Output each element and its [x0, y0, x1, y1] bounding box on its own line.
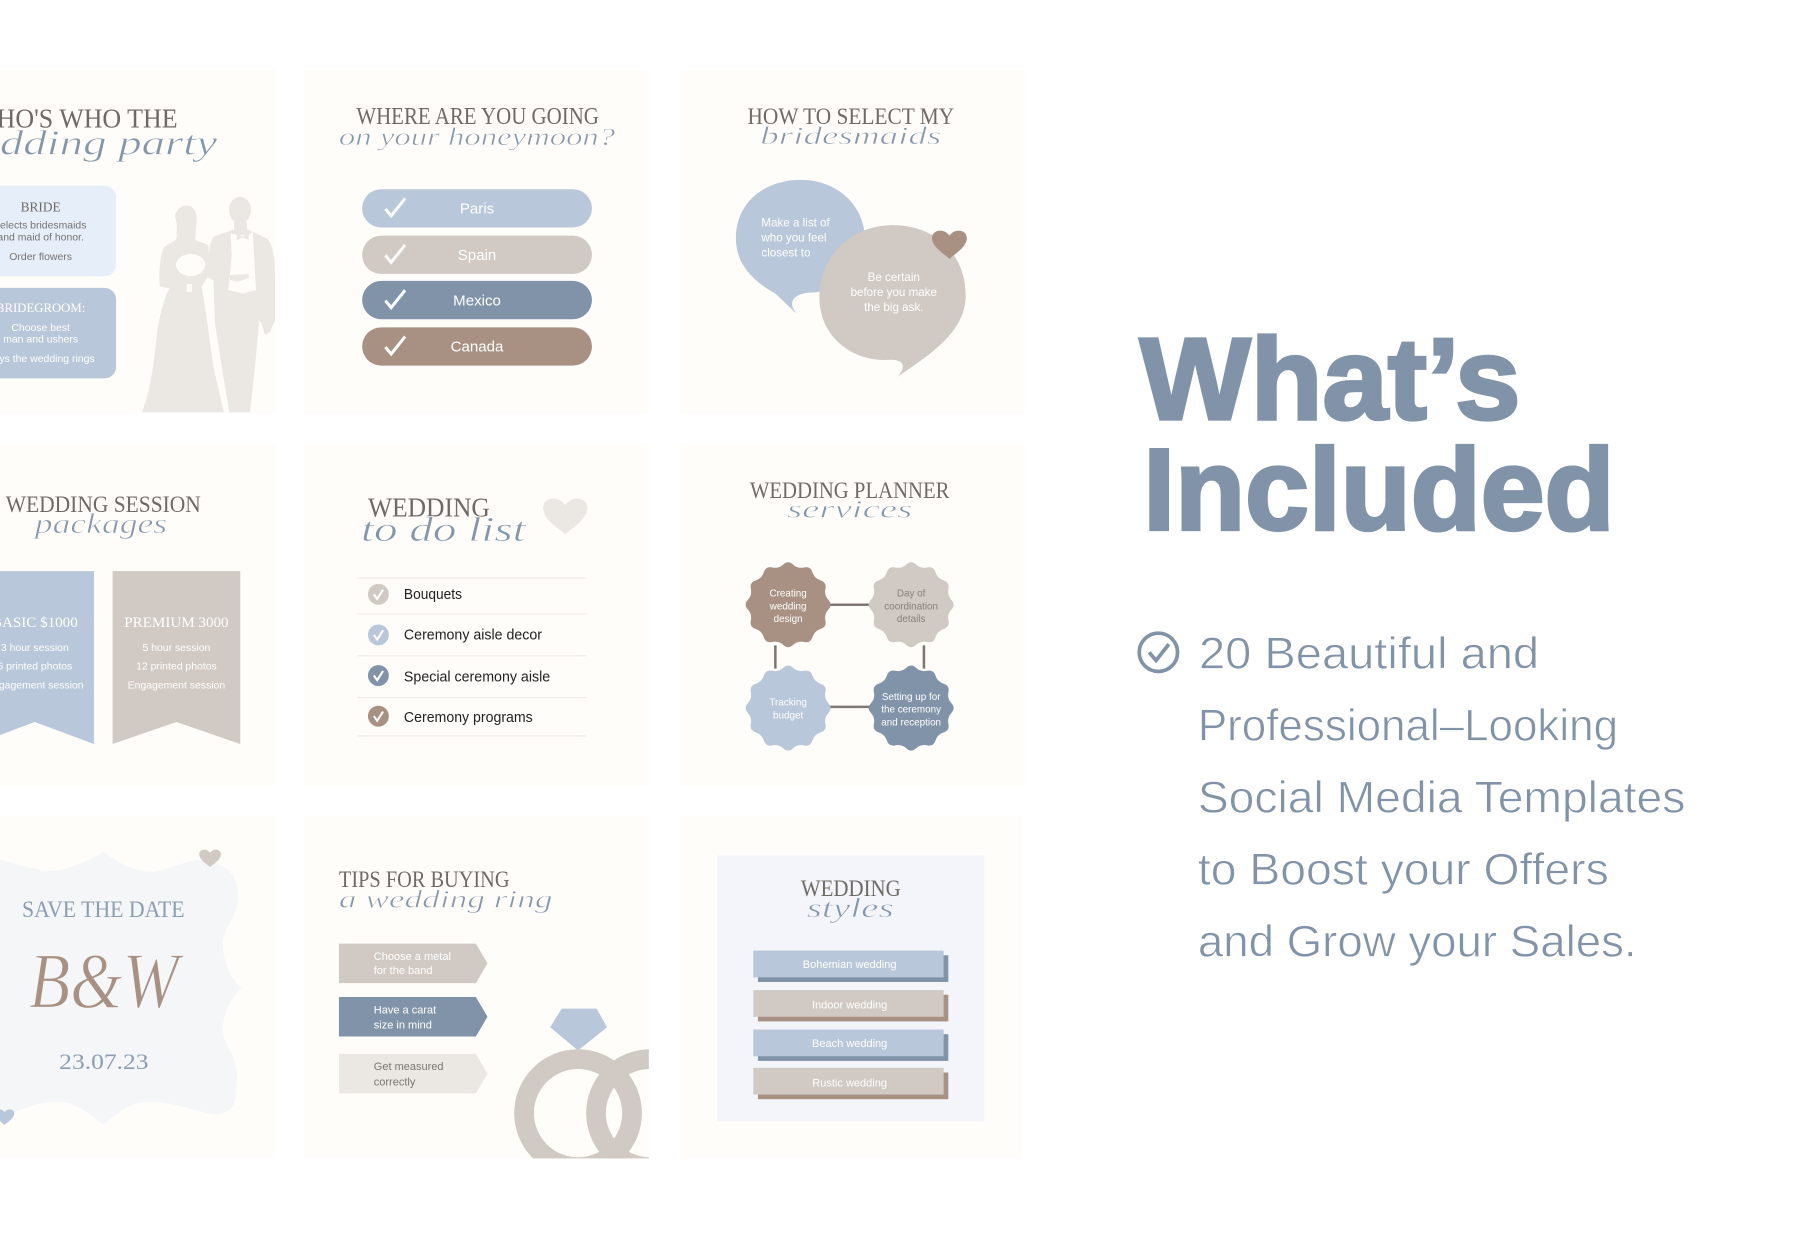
badge: day of coordination details: coordination — [884, 601, 938, 612]
date: 23.07.23 — [59, 1049, 149, 1074]
text block: description: and Grow your Sales. — [1198, 917, 1637, 966]
speech bubble: blue — [736, 180, 865, 313]
heading: wedding session: WEDDING SESSION — [6, 492, 201, 518]
item: Ceremony aisle decor — [368, 624, 542, 645]
tip arrow: measured: correctly — [374, 1076, 416, 1088]
illustration: diamond rings — [514, 1008, 649, 1158]
option: Spain: Spain — [458, 247, 496, 264]
ribbon: premium package: 5 hour session — [142, 643, 211, 654]
tip arrow: measured — [339, 1054, 488, 1093]
text block: description: Professional–Looking — [1198, 702, 1618, 751]
option: Mexico: Mexico — [453, 292, 501, 309]
ribbon: basic package: 3 hour session — [1, 643, 69, 654]
bar: Rustic wedding — [753, 1068, 948, 1099]
ribbon: premium package: Engagement session — [128, 680, 225, 691]
speech bubble: taupe: Be certain — [868, 271, 920, 284]
ribbon: premium package: PREMIUM 3000 — [124, 615, 229, 631]
speech bubble: blue: Make a list of — [761, 216, 831, 229]
option: Paris — [362, 189, 592, 228]
badge: setting up ceremony: the ceremony — [881, 705, 941, 716]
badge: day of coordination details: details — [897, 614, 925, 625]
tip arrow: measured: Get measured — [374, 1061, 444, 1073]
ribbon: premium package: 12 printed photos — [136, 662, 217, 673]
text block: description: Social Media Templates — [1198, 774, 1685, 823]
text block: description: to Boost your Offers — [1198, 845, 1609, 894]
option: Spain — [362, 236, 592, 274]
panel: save the date — [0, 816, 275, 1158]
item: Bouquets — [368, 584, 462, 605]
script heading: on your honeymoon: on your honeymoon? — [339, 122, 615, 151]
item: Special ceremony aisle — [368, 665, 550, 686]
card: bridegroom — [0, 288, 116, 378]
title: What's Included — [1140, 314, 1615, 554]
panel: who's who the wedding party — [0, 70, 275, 413]
tip arrow: metal — [339, 944, 488, 983]
illustration: bride and groom silhouette — [142, 197, 275, 412]
speech bubble: taupe: before you make — [851, 286, 937, 299]
bar: Rustic wedding: Rustic wedding — [812, 1077, 887, 1089]
badge: creating wedding design: wedding — [769, 601, 806, 612]
panel: how to select bridesmaids — [680, 70, 1025, 413]
bar: Beach wedding — [753, 1030, 948, 1061]
badge: tracking budget — [746, 666, 831, 751]
bar: Beach wedding: Beach wedding — [812, 1038, 887, 1050]
item: Ceremony programs: Ceremony programs — [404, 709, 533, 726]
icon: pale heart — [543, 499, 587, 535]
panel: wedding session packages — [0, 445, 275, 786]
badge: creating wedding design: design — [774, 614, 803, 625]
card: pale background — [717, 855, 984, 1121]
card: bridegroom: man and ushers — [3, 334, 78, 345]
badge: day of coordination details — [869, 562, 954, 647]
script heading: a wedding ring: a wedding ring — [339, 885, 553, 914]
tip arrow: carat — [339, 997, 488, 1037]
tip arrow: metal: Choose a metal — [374, 951, 451, 963]
bar: Indoor wedding: Indoor wedding — [812, 1000, 887, 1012]
icon: blue heart — [0, 1109, 14, 1125]
option: Canada — [362, 327, 592, 366]
item: Ceremony aisle decor: Ceremony aisle decor — [404, 627, 542, 644]
badge: creating wedding design — [746, 562, 831, 647]
item: Bouquets: Bouquets — [404, 586, 462, 603]
badge: setting up ceremony: Setting up for — [882, 692, 941, 703]
panel: honeymoon destinations — [304, 70, 649, 413]
card: bride — [0, 186, 116, 276]
text block: description — [1198, 630, 1685, 966]
title: What's Included: What’s — [1140, 314, 1521, 444]
ribbon: basic package — [0, 571, 94, 744]
speech bubble: blue: who you feel — [760, 231, 827, 244]
heading: wedding: WEDDING — [801, 876, 901, 902]
script heading: packages: packages — [32, 508, 167, 540]
option: Mexico — [362, 281, 592, 319]
title: What's Included: Included — [1143, 424, 1615, 554]
script heading: services: services — [787, 495, 912, 524]
script heading: bridesmaids: bridesmaids — [760, 121, 941, 150]
monogram: B&W: B&W — [29, 939, 184, 1026]
panel: wedding styles — [680, 816, 1023, 1158]
panel: wedding planner services — [680, 445, 1025, 786]
heading: save the date: SAVE THE DATE — [22, 897, 185, 923]
badge: creating wedding design: Creating — [769, 589, 807, 600]
panel: wedding to do list — [304, 445, 649, 786]
icon: taupe heart — [199, 850, 221, 867]
ribbon: premium package — [113, 571, 240, 744]
icon: brown heart — [932, 231, 967, 259]
script heading: styles: styles — [807, 893, 894, 924]
icon: check circle — [1139, 633, 1178, 671]
panel: tips for buying a wedding ring — [338, 872, 649, 1158]
heading: how to select my: HOW TO SELECT MY — [748, 104, 954, 130]
option: Paris: Paris — [460, 201, 494, 218]
heading: tips for buying: TIPS FOR BUYING — [339, 867, 510, 893]
badge: day of coordination details: Day of — [897, 589, 926, 600]
text block: description: 20 Beautiful and — [1199, 630, 1539, 679]
script heading: to do list: to do list — [361, 510, 528, 549]
speech bubble: blue: closest to — [761, 247, 810, 260]
tip arrow: metal: for the band — [374, 965, 433, 977]
badge: tracking budget: Tracking — [769, 698, 807, 709]
card: bridegroom: Choose best — [11, 323, 70, 334]
speech bubble: taupe — [819, 225, 966, 377]
bar: Bohemian wedding — [753, 951, 948, 982]
bar: Bohemian wedding: Bohemian wedding — [803, 959, 896, 971]
speech bubble: taupe: the big ask. — [864, 301, 923, 314]
item: Special ceremony aisle: Special ceremony aisle — [404, 668, 550, 685]
card: bride: BRIDE — [21, 199, 61, 214]
option: Canada: Canada — [451, 339, 504, 356]
badge: tracking budget: budget — [773, 710, 803, 721]
heading: wedding planner: WEDDING PLANNER — [750, 478, 950, 504]
tip arrow: carat: Have a carat — [374, 1004, 436, 1016]
heading: where are you going: WHERE ARE YOU GOING — [356, 103, 599, 130]
card: scalloped background — [0, 852, 241, 1125]
bar: Indoor wedding — [753, 990, 948, 1021]
item: Ceremony programs — [368, 706, 533, 727]
badge: setting up ceremony: and reception — [881, 717, 941, 728]
badge: setting up ceremony — [869, 666, 954, 751]
heading: wedding: WEDDING — [368, 493, 490, 524]
tip arrow: carat: size in mind — [374, 1019, 432, 1031]
card: bride: Order flowers — [9, 252, 72, 263]
